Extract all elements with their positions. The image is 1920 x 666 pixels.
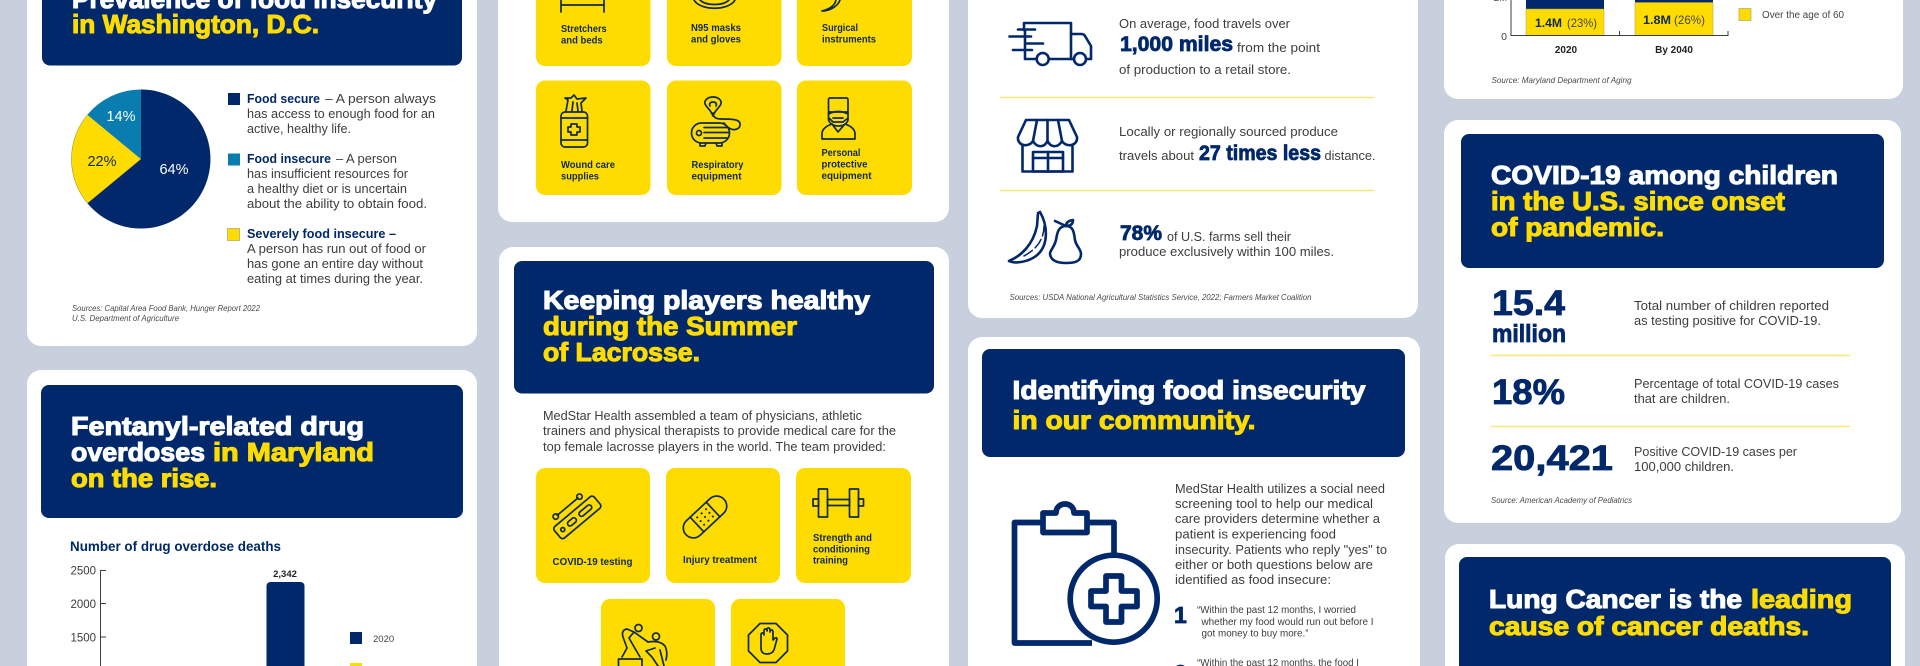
panel: fentanyl overdoses: [27, 370, 477, 666]
stacked bar chart: population over 60: 1.4M: [1535, 16, 1562, 30]
icon: respirator: [692, 97, 740, 146]
body text: screening tool: MedStar Health utilizes a social need: [1175, 481, 1385, 496]
intro text: trainers and physical therapists to provide medical care for the: [543, 423, 896, 438]
bar chart: overdose deaths: 2000: [70, 597, 96, 611]
panel: aging population: [1444, 0, 1903, 99]
icon: delivery truck: [1010, 23, 1091, 65]
heading: lung cancer: leading: [1751, 584, 1852, 614]
stat: 27 times less: travels about: [1119, 148, 1194, 163]
heading: fentanyl overdoses: in Maryland: [213, 437, 374, 467]
icon: mask: [694, 0, 735, 8]
stacked bar chart: population over 60: By 2040: [1655, 45, 1693, 56]
heading: identifying food insecurity: [982, 349, 1405, 457]
stat: 15.4 million: million: [1492, 320, 1566, 348]
chart legend: 2020: [373, 634, 394, 645]
legend: food secure: Food secure: [247, 91, 320, 106]
heading: prevalence of food insecurity: [42, 0, 462, 66]
pie chart: 22%: [87, 154, 117, 170]
stat: 18 percent: that are children.: [1634, 391, 1730, 406]
heading: fentanyl overdoses: [41, 385, 463, 518]
icon: clipboard with medical cross: [1014, 504, 1157, 643]
icon: bandage: [679, 492, 731, 542]
icon: two people helping: [618, 624, 667, 666]
tile: injury treatment: Injury treatment: [683, 554, 757, 566]
stat: 15.4 million: Total number of children reported: [1634, 298, 1829, 313]
icon: stop hand: [748, 624, 788, 662]
legend: severely food insecure: Severely food insecure –: [247, 226, 396, 241]
heading: COVID-19 among children: COVID-19 among children: [1491, 160, 1838, 190]
stacked bar chart: population over 60: (23%): [1567, 16, 1597, 30]
source: pediatrics: Source: American Academy of Pediatrics: [1491, 496, 1632, 505]
panel: COVID-19 among children: [1444, 120, 1901, 523]
tile: N95 masks and gloves: and gloves: [691, 34, 741, 46]
stat: 20,421: 100,000 children.: [1634, 459, 1734, 474]
bar chart: overdose deaths: [70, 564, 304, 666]
body text: screening tool: screening tool to help our medical: [1175, 496, 1373, 511]
body text: screening tool: either or both questions below are: [1175, 557, 1373, 572]
bar chart: overdose deaths: 2500: [70, 564, 96, 578]
stat: 15.4 million: 15.4: [1492, 284, 1566, 323]
pie chart: 14%: [106, 109, 136, 125]
tile: stretchers and beds: [536, 0, 650, 66]
icon: surgical scalpel: [822, 0, 840, 11]
question 1: 1: [1174, 602, 1187, 628]
heading: fentanyl overdoses: overdoses: [71, 437, 205, 467]
tile: surgical instruments: [797, 0, 912, 66]
tile: respiratory equipment: equipment: [692, 170, 742, 182]
stat: 18 percent: 18%: [1492, 373, 1565, 412]
stacked bar chart: population over 60: 0: [1501, 31, 1507, 43]
legend: food secure: active, healthy life.: [247, 121, 351, 136]
icon: wipes container: [561, 95, 588, 147]
icon: dumbbell: [813, 489, 864, 517]
tile: injury prevention: [731, 599, 845, 666]
legend: food insecure: – A person: [336, 151, 397, 166]
sources: food insecurity: [72, 304, 261, 323]
stacked bar chart: population over 60: (26%): [1674, 13, 1705, 27]
stat: 1,000 miles: On average, food travels over: [1119, 16, 1291, 31]
legend: food secure: [228, 91, 437, 136]
heading: lung cancer: [1459, 557, 1891, 666]
tile: personal protective equipment: protective: [822, 158, 868, 170]
tile: wound care supplies: supplies: [561, 170, 599, 182]
tile: personal protective equipment: Personal: [822, 147, 861, 159]
stat: 1,000 miles: [1119, 16, 1320, 77]
legend: food secure: has access to enough food for an: [247, 106, 435, 121]
body text: screening tool: [1175, 481, 1387, 587]
tile: wound care supplies: [536, 80, 650, 195]
legend: severely food insecure: has gone an entire day without: [247, 256, 423, 271]
heading: summer of lacrosse: Keeping players healthy: [543, 285, 871, 315]
icon: masked clinician: [822, 98, 855, 139]
tile: strength and conditioning training: training: [813, 554, 848, 566]
bar chart: overdose deaths: 2,342: [273, 569, 297, 580]
legend: food insecure: has insufficient resources for: [247, 166, 409, 181]
panel: prevalence of food insecurity: [27, 0, 477, 346]
intro text: top female lacrosse players in the world. The team provided:: [543, 439, 886, 454]
chart legend: over 60: [1739, 8, 1844, 21]
question 1: got money to buy more.”: [1202, 628, 1309, 640]
tile: stretchers and beds: and beds: [561, 34, 603, 46]
heading: summer of lacrosse: of Lacrosse.: [543, 337, 700, 367]
stat: 27 times less: distance.: [1324, 148, 1376, 163]
tile: stretchers and beds: Stretchers: [561, 23, 607, 35]
heading: summer of lacrosse: during the Summer: [543, 311, 797, 341]
intro text: MedStar Health assembled a team of physicians, athletic: [543, 408, 862, 423]
stacked bar chart: population over 60: [1494, 0, 1728, 56]
icon: storefront: [1018, 120, 1077, 172]
panel: identifying food insecurity: [968, 337, 1420, 666]
stat: 78 percent: of U.S. farms sell their: [1167, 229, 1292, 244]
body text: screening tool: identified as food insecure:: [1175, 572, 1331, 587]
tile: strength and conditioning training: conditioning: [813, 544, 870, 556]
icon: test strip: [546, 487, 602, 540]
source: food miles: Sources: USDA National Agricultural Statistics Service, 2022; Farmers Market Coalition: [1010, 293, 1312, 302]
legend: severely food insecure: eating at times during the year.: [247, 271, 423, 286]
tile: respiratory equipment: [667, 80, 782, 195]
tile: COVID-19 testing: COVID-19 testing: [552, 556, 632, 568]
tile: strength and conditioning training: [796, 468, 911, 583]
tile: athlete support: [601, 599, 715, 666]
heading: lung cancer: cause of cancer deaths.: [1489, 611, 1809, 641]
stat: 18 percent: [1492, 373, 1839, 412]
legend: food secure: – A person always: [325, 91, 437, 106]
legend: food insecure: a healthy diet or is uncertain: [247, 181, 407, 196]
legend: food insecure: Food insecure: [247, 151, 331, 166]
chart legend: [350, 632, 394, 666]
heading: COVID-19 among children: [1461, 134, 1884, 268]
legend: severely food insecure: [228, 226, 427, 286]
heading: identifying food insecurity: Identifying food insecurity: [1012, 375, 1366, 405]
tile: N95 masks and gloves: N95 masks: [691, 22, 741, 34]
source: aging: Source: Maryland Department of Aging: [1492, 76, 1632, 85]
stat: 78 percent: 78%: [1120, 222, 1162, 245]
heading: COVID-19 among children: of pandemic.: [1491, 212, 1664, 242]
stat: 27 times less: [1119, 124, 1376, 165]
question 1: [1174, 602, 1374, 640]
icon: banana and pear: [1009, 212, 1081, 263]
icon: stretcher: [561, 0, 604, 12]
panel: medical supplies: [498, 0, 949, 222]
stat: 27 times less: Locally or regionally sourced produce: [1119, 124, 1338, 139]
question 1: “Within the past 12 months, I worried: [1197, 604, 1356, 616]
body text: screening tool: care providers determine whether a: [1175, 511, 1381, 526]
panel: summer of lacrosse: [499, 247, 949, 666]
sources: food insecurity: U.S. Department of Agriculture: [72, 314, 180, 323]
pie chart: 64%: [159, 162, 189, 178]
tile: personal protective equipment: equipment: [822, 170, 872, 182]
tile: wound care supplies: Wound care: [561, 159, 615, 171]
legend: food insecure: [228, 151, 427, 211]
body text: screening tool: insecurity. Patients who reply "yes" to: [1175, 542, 1387, 557]
tile: respiratory equipment: Respiratory: [692, 159, 744, 171]
heading: lung cancer: Lung Cancer is the: [1489, 584, 1742, 614]
tile: surgical instruments: instruments: [822, 34, 876, 46]
stacked bar chart: population over 60: 2020: [1555, 45, 1578, 56]
legend: food insecure: about the ability to obtain food.: [247, 196, 427, 211]
tile: COVID-19 testing: [536, 468, 650, 583]
chart legend: over 60: Over the age of 60: [1762, 10, 1844, 21]
tile: N95 masks and gloves: [667, 0, 782, 66]
stat: 15.4 million: as testing positive for COVID-19.: [1634, 313, 1821, 328]
tile: surgical instruments: Surgical: [822, 22, 858, 34]
stat: 20,421: 20,421: [1491, 439, 1613, 478]
stat: 78 percent: [1119, 222, 1334, 259]
stat: 20,421: [1491, 439, 1798, 478]
heading: identifying food insecurity: in our community.: [1012, 405, 1256, 435]
legend: severely food insecure: A person has run out of food or: [247, 241, 427, 256]
bar chart: overdose deaths: 1500: [70, 630, 96, 644]
intro text: [543, 408, 896, 454]
heading: summer of lacrosse: [514, 261, 934, 394]
panel: lung cancer: [1445, 544, 1905, 666]
stat: 27 times less: 27 times less: [1199, 142, 1321, 165]
stat: 1,000 miles: from the point: [1237, 40, 1320, 55]
stat: 18 percent: Percentage of total COVID-19 cases: [1634, 376, 1839, 391]
tile: injury treatment: [666, 468, 780, 583]
stat: 15.4 million: [1492, 284, 1829, 348]
heading: COVID-19 among children: in the U.S. since onset: [1491, 186, 1785, 216]
body text: screening tool: patient is experiencing food: [1175, 526, 1336, 542]
heading: fentanyl overdoses: Fentanyl-related drug: [71, 411, 364, 441]
panel: food miles: [968, 0, 1418, 318]
tile: personal protective equipment: [797, 80, 912, 195]
tile: strength and conditioning training: Strength and: [813, 532, 872, 544]
heading: prevalence of food insecurity: in Washington, D.C.: [72, 9, 319, 39]
heading: fentanyl overdoses: on the rise.: [71, 463, 217, 493]
stat: 78 percent: produce exclusively within 100 miles.: [1119, 244, 1334, 259]
stat: 1,000 miles: of production to a retail store.: [1119, 62, 1291, 77]
pie chart: [71, 89, 210, 228]
stat: 1,000 miles: 1,000 miles: [1120, 33, 1233, 56]
chart title: Number of drug overdose deaths: [70, 538, 281, 554]
question 1: whether my food would run out before I: [1201, 616, 1374, 628]
stat: 20,421: Positive COVID-19 cases per: [1634, 444, 1798, 459]
stacked bar chart: population over 60: 1.8M: [1643, 13, 1671, 27]
sources: food insecurity: Sources: Capital Area Food Bank, Hunger Report 2022: [72, 304, 261, 313]
